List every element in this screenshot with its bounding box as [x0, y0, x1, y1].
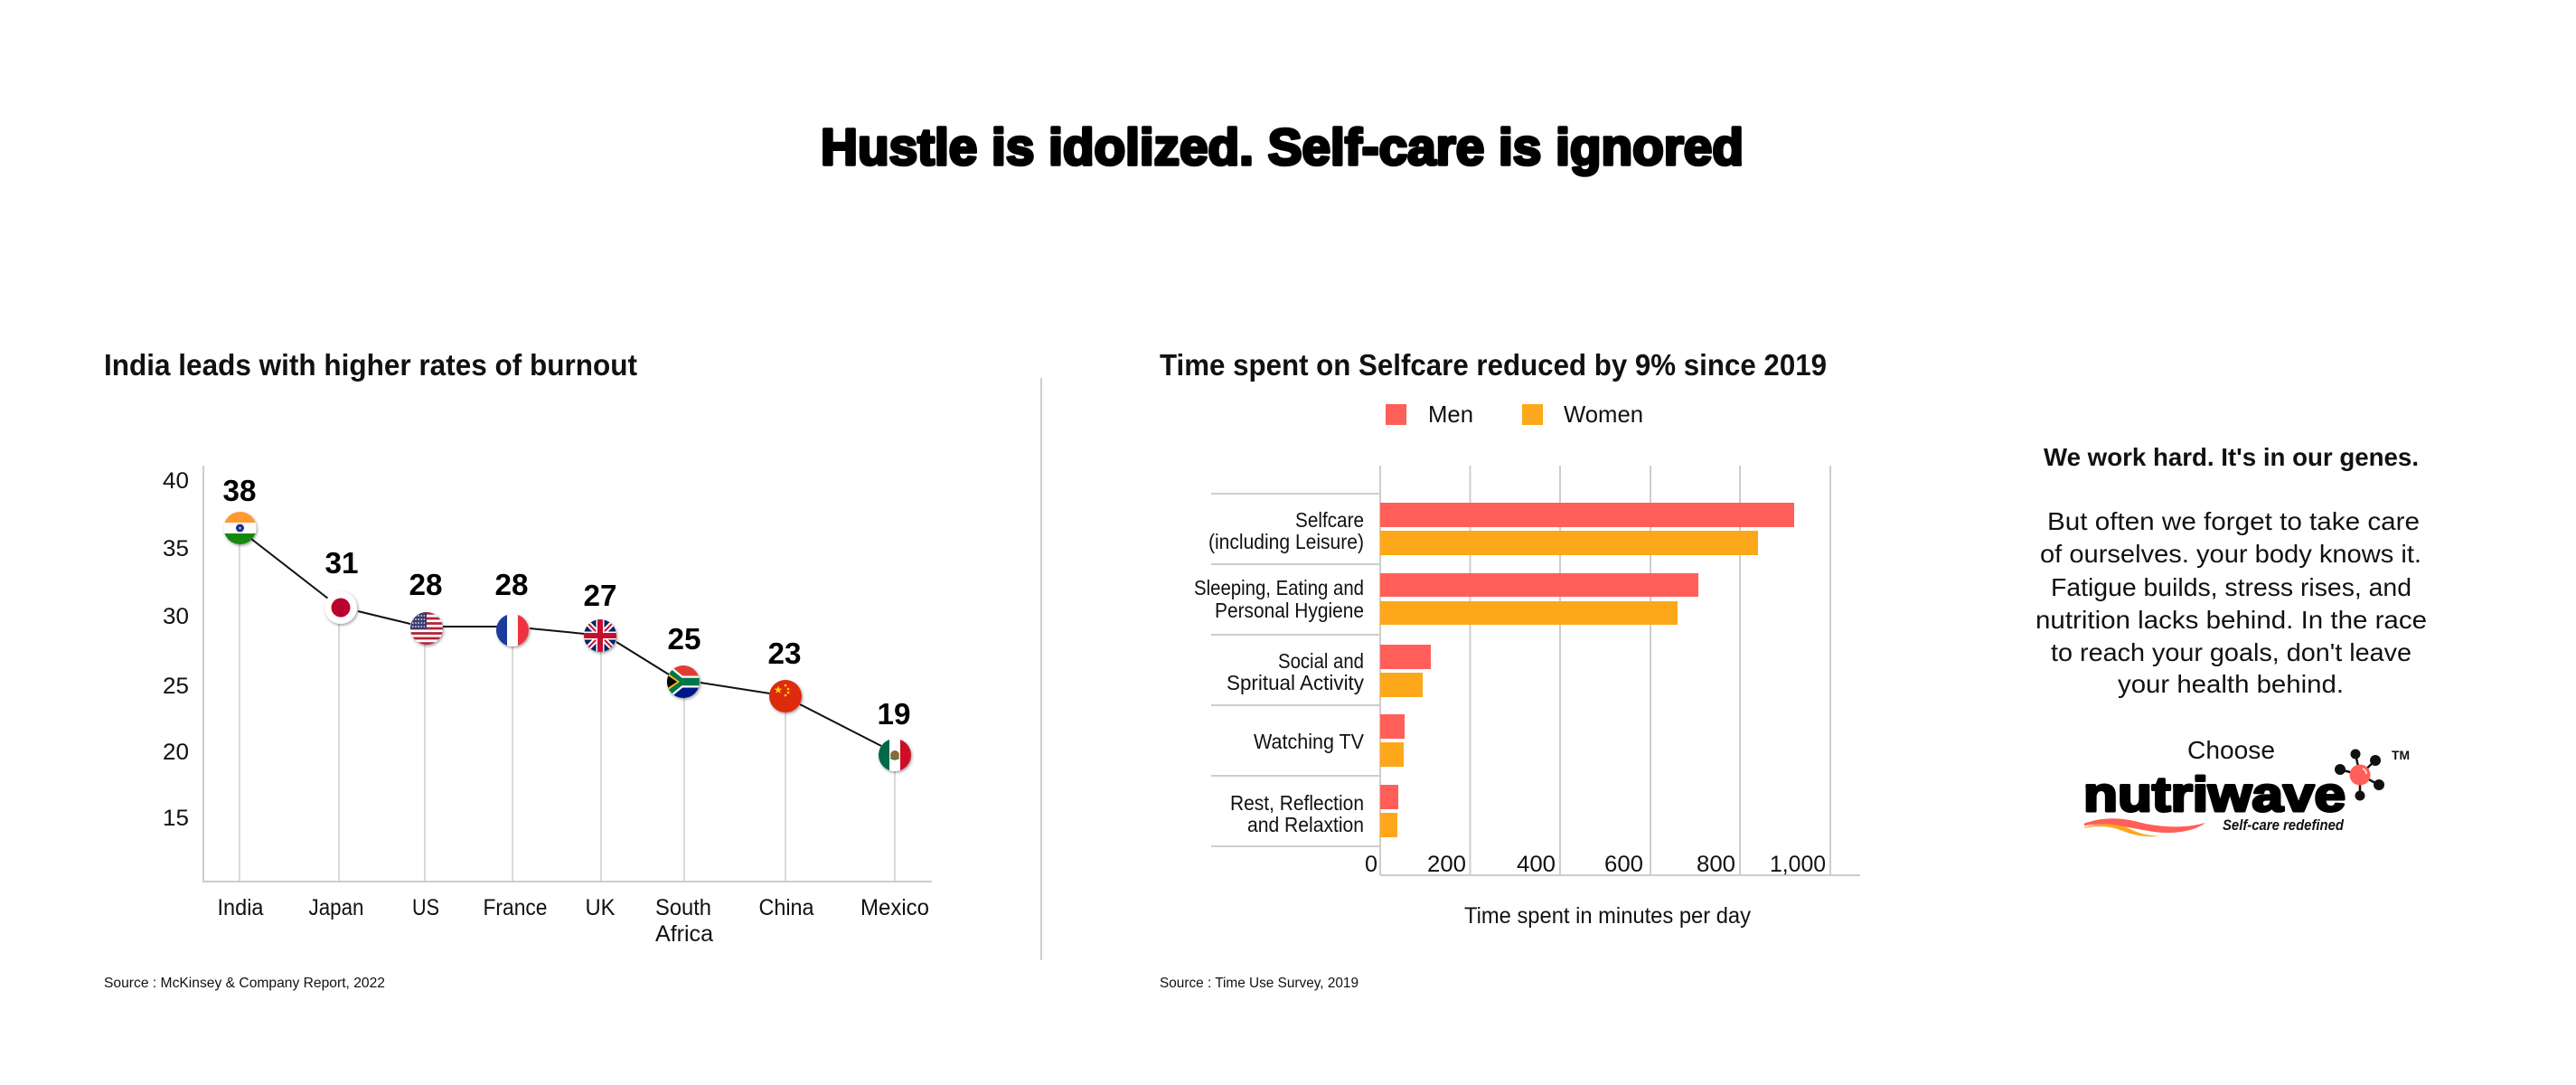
- x axis tick labels: 400: [1517, 852, 1556, 877]
- message body: [2035, 507, 2427, 698]
- legend: Men: [1428, 401, 1473, 428]
- x axis tick labels: 600: [1604, 852, 1643, 877]
- category labels: and Relaxtion: [1247, 813, 1364, 836]
- y axis labels: [163, 468, 189, 831]
- message lead: We work hard. It's in our genes.: [2044, 443, 2419, 471]
- burnout trend line: [251, 539, 881, 746]
- x axis country labels: US: [412, 895, 439, 920]
- panel: burnout line chart: [104, 348, 932, 991]
- data values: 27: [584, 579, 616, 612]
- logo: nutriwave: [2083, 748, 2410, 836]
- x axis tick labels: 1,000: [1770, 852, 1826, 877]
- data values: 19: [877, 697, 911, 731]
- category labels: Rest, Reflection: [1230, 791, 1364, 815]
- category labels: Personal Hygiene: [1215, 599, 1364, 622]
- x axis tick labels: 200: [1427, 852, 1466, 877]
- data values: [222, 474, 911, 731]
- category labels: Watching TV: [1254, 730, 1365, 753]
- x axis title: Time spent in minutes per day: [1464, 903, 1751, 929]
- y axis labels: 40: [163, 468, 189, 494]
- y axis labels: 25: [163, 674, 189, 699]
- data values: 28: [409, 568, 443, 601]
- flag: Japan: [324, 591, 357, 624]
- flag: Mexico: [879, 739, 911, 771]
- message body: of ourselves. your body knows it.: [2040, 540, 2421, 568]
- data values: 28: [495, 568, 528, 601]
- category labels: Selfcare: [1295, 508, 1364, 532]
- x axis country labels: Japan: [309, 895, 363, 920]
- x axis country labels: South: [655, 895, 711, 920]
- bars: men: [1380, 503, 1794, 809]
- y axis labels: 15: [163, 806, 189, 831]
- flag: US: [410, 612, 443, 645]
- x axis country labels: India: [217, 895, 264, 920]
- category labels: Social and: [1278, 649, 1364, 673]
- x axis tick labels: 800: [1697, 852, 1735, 877]
- source: burnout: Source : McKinsey & Company Report, 2022: [104, 976, 385, 991]
- flag: France: [496, 614, 529, 646]
- x axis country labels: Mexico: [860, 895, 929, 920]
- x axis country labels: France: [483, 895, 548, 920]
- category labels: Sleeping, Eating and: [1194, 576, 1364, 599]
- source: time use: Source : Time Use Survey, 2019: [1160, 976, 1359, 991]
- data values: 31: [325, 546, 358, 580]
- panel: selfcare bar chart: [1160, 348, 1860, 991]
- trademark: TM: [2392, 748, 2410, 762]
- category labels: [1194, 508, 1365, 836]
- gridlines and axis: [1211, 466, 1860, 875]
- panel divider: [1040, 378, 1042, 960]
- x axis country labels: UK: [586, 895, 616, 920]
- choose label: Choose: [2187, 736, 2275, 764]
- heading: selfcare: Time spent on Selfcare reduced by 9% since 2019: [1160, 348, 1827, 382]
- y axis labels: 30: [163, 604, 189, 629]
- x axis tick labels: [1365, 852, 1826, 877]
- x axis country labels: China: [759, 895, 814, 920]
- data values: 38: [222, 474, 257, 507]
- bars: women: [1380, 531, 1758, 837]
- drop lines: [240, 542, 895, 882]
- flag: South Africa: [662, 665, 703, 698]
- heading: burnout: India leads with higher rates of burnout: [104, 348, 637, 382]
- legend: Women: [1564, 401, 1643, 428]
- y axis labels: 20: [163, 740, 189, 765]
- data values: 23: [768, 637, 801, 670]
- message body: to reach your goals, don't leave: [2051, 638, 2411, 666]
- chart axes: [203, 466, 932, 882]
- panel: message: [2035, 443, 2427, 836]
- title: Hustle is idolized. Self-care is ignored: [821, 118, 1744, 176]
- message body: your health behind.: [2118, 670, 2344, 698]
- logo wordmark: nutriwave: [2083, 768, 2346, 822]
- legend: [1386, 401, 1643, 428]
- logo tagline: Self-care redefined: [2223, 816, 2345, 834]
- message body: But often we forget to take care: [2047, 507, 2420, 535]
- logo molecule icon: [2335, 749, 2384, 801]
- flag: UK: [584, 619, 616, 652]
- category labels: (including Leisure): [1208, 530, 1364, 553]
- x axis country labels: [217, 895, 929, 947]
- y axis labels: 35: [163, 536, 189, 561]
- flag: India: [224, 512, 257, 544]
- x axis country labels: Africa: [655, 921, 713, 947]
- x axis tick labels: 0: [1365, 852, 1377, 877]
- message body: nutrition lacks behind. In the race: [2035, 606, 2427, 634]
- data values: 25: [667, 622, 701, 656]
- category labels: Spritual Activity: [1227, 671, 1364, 694]
- logo wave: [2084, 818, 2205, 836]
- flag: China: [769, 680, 802, 712]
- message body: Fatigue builds, stress rises, and: [2051, 573, 2411, 601]
